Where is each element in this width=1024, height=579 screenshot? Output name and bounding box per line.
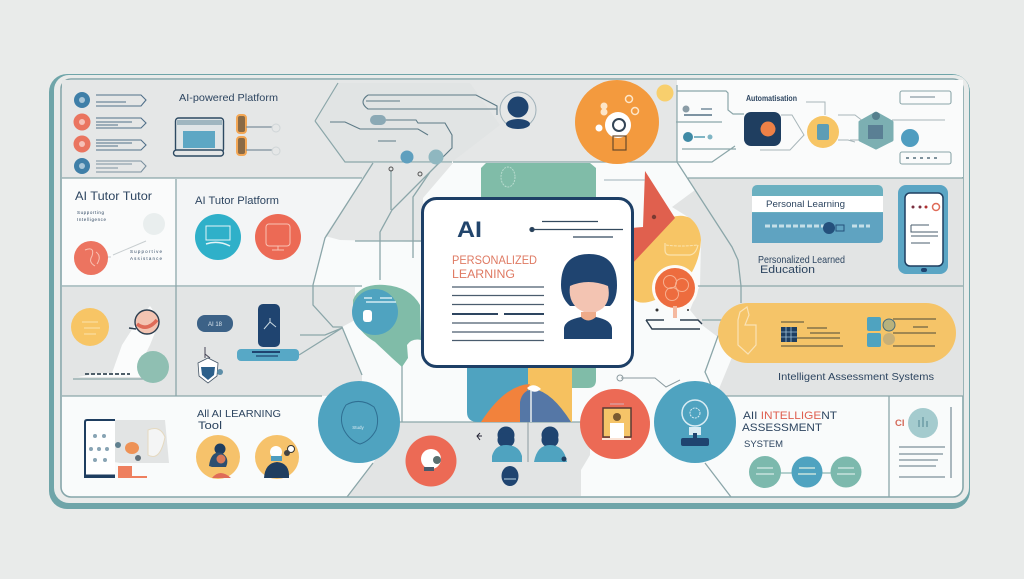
icon: red circle with head [406, 436, 456, 486]
orange arc [481, 384, 530, 422]
connected circles [749, 456, 862, 488]
red arrow shape [604, 171, 675, 265]
portrait [561, 254, 617, 339]
caption: intelligent assessment systems: Intelligent Assessment Systems [778, 371, 934, 383]
navy pill: AI 18 [208, 322, 223, 328]
bottom yellow block [528, 365, 572, 422]
card: AI personalized learning [422, 198, 632, 366]
white hill [78, 306, 160, 377]
baseline [73, 378, 145, 380]
subheading: Tool [198, 420, 222, 432]
bottom green block [572, 365, 596, 388]
icon: yellow person [196, 435, 240, 479]
heading line 3: SYSTEM [744, 439, 783, 450]
yellow blob [630, 216, 701, 303]
panel: AI tutor platform [195, 195, 301, 260]
heading: AI Tutor Tutor [75, 189, 152, 203]
icon: yellow person with speech [255, 435, 299, 479]
connector [621, 378, 680, 387]
faint circle [143, 213, 165, 235]
body lines [452, 287, 544, 340]
heading line 2: ASSESSMENT [742, 422, 822, 434]
small caption: Supportive [130, 249, 162, 254]
text: personalized learned education: Personalized Learned [758, 254, 845, 266]
small caption: Intelligence [77, 217, 106, 222]
heading: Personal Learning [766, 199, 845, 210]
bottom blue block [467, 365, 528, 422]
icon: tablet illustration [85, 420, 169, 478]
heading: AI Tutor Platform [195, 195, 279, 207]
small caption: Supporting [77, 210, 104, 215]
icon: yellow dot [656, 84, 674, 102]
icon: teal head circle: Study [352, 425, 364, 430]
panel: devices [197, 304, 299, 383]
faint face icon [501, 167, 515, 187]
icon: teal circle [137, 351, 169, 383]
icon: orange circle with robot [575, 80, 659, 164]
icon: smartphone [898, 185, 948, 274]
heading: All AI LEARNING [197, 408, 281, 420]
outer frame [49, 74, 970, 509]
panel: personal learning card [752, 185, 883, 243]
header lines [530, 222, 623, 237]
icon: phone [258, 304, 280, 347]
center colored blocks [467, 163, 596, 422]
small caption: Assistance [130, 256, 162, 261]
icon list [74, 92, 146, 174]
heading: AI-powered Platform [179, 92, 278, 104]
panel: AI learning tool [85, 408, 299, 479]
heading: Automatisation [746, 94, 797, 103]
panel: yellow pill [718, 303, 956, 363]
subtitle learning: LEARNING [452, 269, 515, 281]
icon: teal head circle [318, 381, 400, 463]
panel: magnifier illustration [71, 306, 169, 383]
text: personalized learned education [758, 254, 845, 276]
subtitle personalized: PERSONALIZED [452, 255, 537, 267]
grid lines [62, 162, 963, 497]
people group [477, 422, 567, 486]
text: personalized learned education: Education [760, 264, 815, 276]
slate arc [520, 389, 571, 422]
panel: checklist document [895, 407, 951, 478]
panel: automation [676, 80, 963, 177]
icon: red monitor [255, 214, 301, 260]
blob: teal and green [352, 285, 421, 367]
heading line 1: AII INTELLIGE NT [743, 410, 837, 422]
panel: AI tutor tutor [74, 189, 165, 275]
green top tab [481, 163, 596, 198]
white spot [527, 385, 541, 392]
icon: yellow circle [71, 308, 109, 346]
icon: person [500, 92, 536, 129]
icon: magnifier [129, 310, 159, 334]
icon: blue circle with robot head [654, 381, 736, 463]
panel: AI-powered platform [74, 92, 280, 174]
title AI: AI [457, 217, 482, 242]
icon: orange network with stand [646, 265, 702, 329]
blue bar [237, 349, 299, 361]
panel: AI intelligent assessment system [742, 410, 862, 488]
icon: red circle [74, 241, 108, 275]
icon: orange tags [237, 115, 280, 155]
icon: laptop [174, 118, 224, 156]
panel: checklist document: CI [895, 418, 904, 429]
icon: shield [198, 347, 223, 383]
panel backgrounds [62, 80, 963, 496]
panel: top hexagon network [315, 83, 500, 176]
icon: red circle with portrait [580, 389, 650, 459]
icon: teal monitor [195, 214, 241, 260]
